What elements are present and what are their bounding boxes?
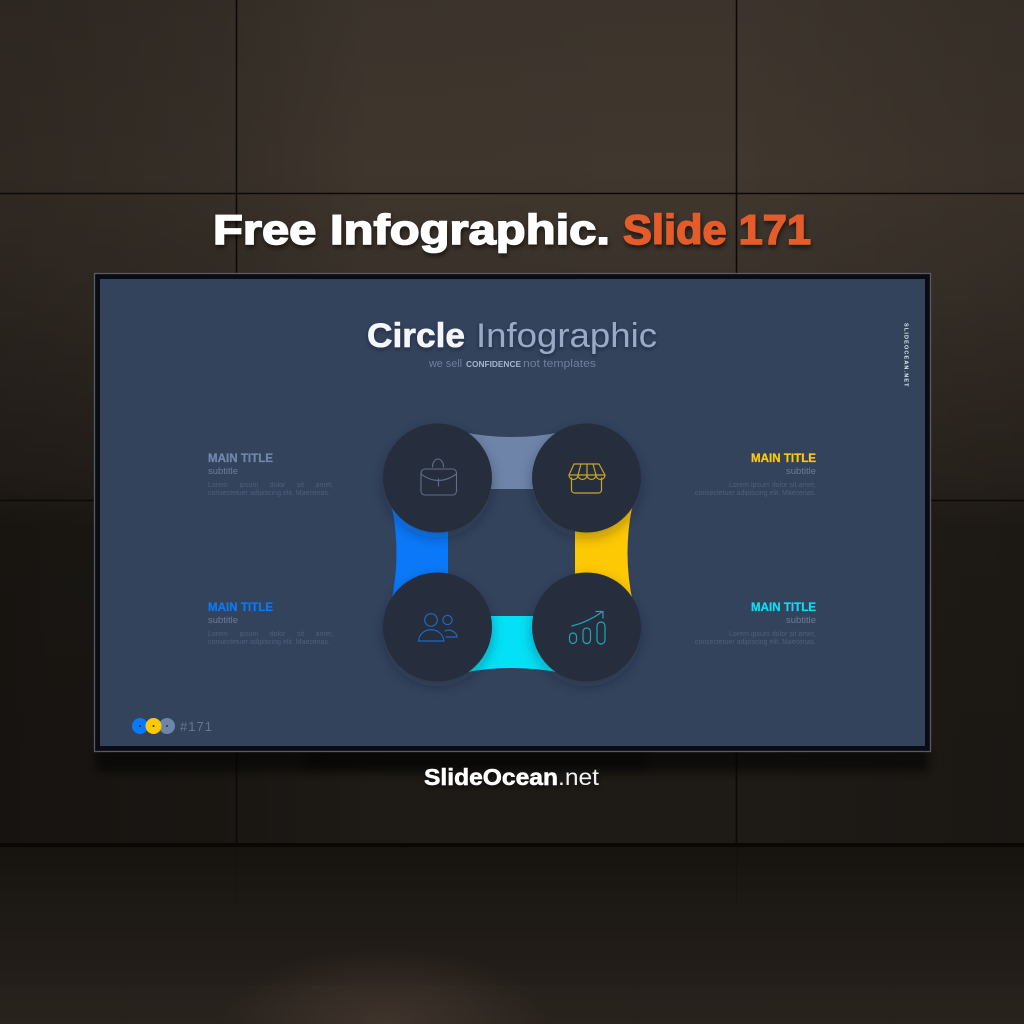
slide title: Circle [367,317,465,355]
icon: growth chart [570,612,605,644]
slide tagline: CONFIDENCE [466,360,522,369]
icon: people [418,614,457,641]
text block: top left: consectetuer adipiscing elit. Maecenas. [208,490,330,497]
icon: storefront [569,464,605,493]
text block: top left: subtitle [208,466,238,477]
text block: top right: consectetuer adipiscing elit. Maecenas. [695,490,816,497]
main heading [213,206,811,253]
icon: briefcase [421,459,456,495]
text block: bottom left: Lorem ipsum dolor sit amet, [208,631,333,638]
connector: blue left [391,478,448,603]
text block: bottom right: subtitle [786,615,816,626]
circle diagram [383,424,641,682]
slide number badge [132,718,212,734]
node: bottom right circle [532,572,641,682]
text block: top right: MAIN TITLE [751,451,816,465]
node: top right circle [532,424,641,532]
footer brand: SlideOcean [424,764,558,790]
slide panel [100,279,925,746]
text block: top left: Lorem ipsum dolor sit amet, [208,482,333,489]
connector: yellow right [575,478,633,603]
slide tagline: not templates [523,358,597,370]
heading: free infographic: Free Infographic. [213,206,610,253]
slide tagline: we sell [428,358,462,370]
monitor drop shadow [96,745,929,772]
monitor frame [94,274,930,752]
text block: bottom left: MAIN TITLE [208,600,273,614]
text block: bottom right: MAIN TITLE [751,600,816,614]
text block: top right [695,451,816,497]
text block: bottom left: subtitle [208,615,238,626]
text block: bottom right: Lorem ipsum dolor sit amet, [729,631,816,638]
connector: grey top [462,432,562,489]
vertical brand label: SLIDEOCEAN.NET [902,323,908,388]
slide number badge: #171 [180,719,212,734]
text block: top right: Lorem ipsum dolor sit amet, [729,482,816,489]
slide tagline [428,358,597,370]
text block: top right: subtitle [786,466,816,477]
node: bottom left circle [383,572,492,682]
heading: slide 171: Slide 171 [623,206,811,253]
text block: top left [208,451,333,497]
connector: cyan bottom [462,616,562,673]
slide title: Infographic [476,317,657,355]
text block: bottom right [695,600,816,646]
footer brand: .net [558,764,600,790]
text block: bottom right: consectetuer adipiscing elit. Maecenas. [695,639,816,646]
slide title [367,317,657,355]
text block: top left: MAIN TITLE [208,451,273,465]
node: top left circle [383,424,492,532]
text block: bottom left: consectetuer adipiscing elit. Maecenas. [208,639,330,646]
text block: bottom left [208,600,333,646]
